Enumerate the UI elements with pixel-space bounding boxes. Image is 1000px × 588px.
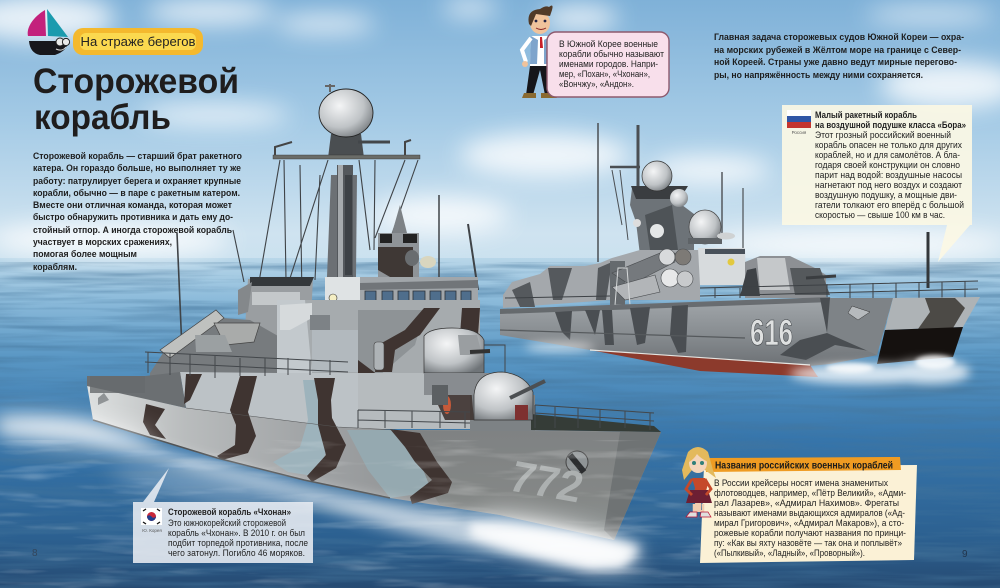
white deckhouse — [698, 248, 746, 285]
main deckhouse — [277, 300, 512, 430]
callout: South Korea ship names: корабли обычно называют — [559, 49, 664, 59]
forward tower — [378, 233, 419, 277]
intro text block: Вместе они отличная команда, которая может — [33, 200, 232, 211]
callout: South Korea ship names: В Южной Корее военные — [559, 39, 658, 49]
callout: South Korea ship names: «Вончжу», «Андон». — [559, 79, 634, 89]
intro text block — [33, 151, 242, 273]
radar mast — [327, 175, 357, 277]
intro text block: корабли, обычно — в паре с ракетным катером. — [33, 188, 240, 199]
panel: Russian warship names — [700, 457, 917, 563]
upper hull band — [180, 372, 358, 428]
Cheonan text: Сторожевой корабль «Чхонан» — [168, 507, 291, 517]
Bora-class text: на воздушной подушке класса «Бора» — [815, 120, 966, 130]
ship: South Korean patrol corvette 772 — [87, 84, 661, 540]
masts — [598, 123, 928, 288]
Bora-class text: кораблей, но и для самолётов. А бла- — [815, 150, 960, 160]
icon: Russian flag: Россия — [792, 130, 807, 135]
Bora-class text: воздушную подушку, а мощные дви- — [815, 190, 957, 200]
callout: South Korea ship names: именами городов. Напри- — [559, 59, 658, 69]
top right text block: ры, но напряжённость между ними сохраняется. — [714, 70, 923, 81]
heading ribbon — [706, 457, 901, 472]
Cheonan text: Это южнокорейский сторожевой — [168, 518, 286, 528]
logo: sailboat — [28, 9, 70, 55]
red boot topping — [590, 350, 818, 377]
bow wave and wake foam — [0, 409, 700, 588]
catamaran bow — [827, 298, 893, 355]
number 772: 772 — [504, 452, 589, 512]
names text: мирал Григорович», «Адмирал Макаров»), а сто- — [714, 518, 904, 528]
character: girl — [682, 447, 716, 517]
Cheonan text: корабль «Чхонан». В 2010 г. он был — [168, 528, 305, 538]
rigging and antennas — [177, 160, 478, 350]
funnel and after deckhouse — [244, 277, 313, 345]
Cheonan text — [168, 507, 308, 558]
aft superstructure — [503, 250, 700, 308]
page number 8: 8 — [32, 548, 38, 559]
names text: называют именами выдающихся адмиралов («Ад- — [714, 508, 905, 518]
icon: South Korean flag — [141, 508, 162, 533]
icon: Russian flag — [787, 110, 811, 135]
hull — [87, 385, 661, 540]
Bora-class text — [815, 110, 966, 220]
Bora-class text: Этот грозный российский военный — [815, 130, 951, 140]
names text — [714, 478, 906, 558]
names text: рожевые корабли получают названия по принци- — [714, 528, 906, 538]
top right text block: на морских рубежей в Жёлтом море на границе с Север- — [714, 45, 961, 56]
Bora-class text: годаря своей конструкции он словно — [815, 160, 960, 170]
foredeck — [531, 414, 661, 432]
intro text block: участвует в морских сражениях, — [33, 237, 172, 248]
names text: рал Лазарев», «Адмирал Нахимов». Фрегаты — [714, 498, 899, 508]
intro text block: быстро обнаружить противника и дать ему до- — [33, 212, 233, 223]
names text: В России крейсеры носят имена знаменитых — [714, 478, 888, 488]
boat — [214, 323, 260, 345]
fore guns — [745, 256, 826, 298]
railings — [145, 345, 654, 430]
intro text block: работу: патрулирует берега и охраняет крупные — [33, 176, 241, 187]
railing — [505, 281, 978, 298]
gun turrets — [424, 328, 484, 373]
Bora-class text: скоростью — свыше 100 км в час. — [815, 210, 945, 220]
callout: Bora-class description — [782, 105, 972, 262]
intro text block: помогая более мощным — [33, 249, 137, 260]
title: корабль — [34, 98, 171, 137]
missile launchers — [612, 249, 693, 300]
tower — [630, 188, 694, 255]
Cheonan text: чего затонул. Погибло 46 моряков. — [168, 548, 305, 558]
names text: флотоводцев, например, «Пётр Великий», «Адми- — [714, 488, 906, 498]
heading ribbon: Названия российских военных кораблей — [715, 460, 893, 472]
ship: Bora-class missile corvette 616 — [500, 123, 980, 384]
icon: South Korean flag: Ю. Корея — [142, 528, 162, 533]
Bora-class text: корабль опасен не только для других — [815, 140, 962, 150]
names text: («Пылкивый», «Ладный», «Проворный»). — [714, 548, 865, 558]
Cheonan text: подбит торпедой противника, после — [168, 538, 308, 548]
after deck structures — [150, 318, 285, 378]
heading badge — [73, 28, 203, 55]
top right text block: Главная задача сторожевых судов Южной Кореи — охра- — [714, 32, 964, 43]
wake — [525, 343, 970, 384]
character: boy — [522, 6, 558, 98]
callout: South Korea ship names — [547, 32, 669, 97]
Bora-class text: гатели толкают его вперёд с большой — [815, 200, 964, 210]
bridge — [325, 277, 478, 312]
intro text block: Сторожевой корабль — старший брат ракетного — [33, 151, 242, 162]
intro text block: стойный отпор. А иногда сторожевой корабль — [33, 225, 232, 236]
intro text block: кораблям. — [33, 262, 77, 273]
number 616: 616 — [750, 312, 793, 353]
cyan camouflage — [273, 380, 326, 477]
title — [33, 62, 239, 137]
Bora-class text: нагнетают под него воздух и создают — [815, 180, 962, 190]
names text: пу: «Как вы яхту назовёте — так она и поплывёт» — [714, 538, 902, 548]
intro text block: катера. Он гораздо больше, но выполняет ту же — [33, 163, 241, 174]
top right text block: ной Кореей. Страны уже давно ведут мирные перегово- — [714, 57, 957, 68]
Bora-class text: Малый ракетный корабль — [815, 110, 917, 120]
hull side — [500, 297, 878, 366]
callout: Cheonan description — [133, 468, 313, 563]
heading badge: На страже берегов — [80, 34, 196, 49]
page number 9: 9 — [962, 549, 968, 560]
callout: South Korea ship names: мер, «Похан», «Чхонан», — [559, 69, 650, 79]
brown camouflage stripes — [143, 374, 474, 504]
title: Сторожевой — [33, 62, 239, 101]
top right text block — [714, 32, 964, 81]
torpedo launcher — [160, 310, 224, 358]
Bora-class text: парит над водой: воздушные насосы — [815, 170, 962, 180]
stern deck gear — [87, 372, 186, 408]
anchor — [566, 451, 588, 473]
